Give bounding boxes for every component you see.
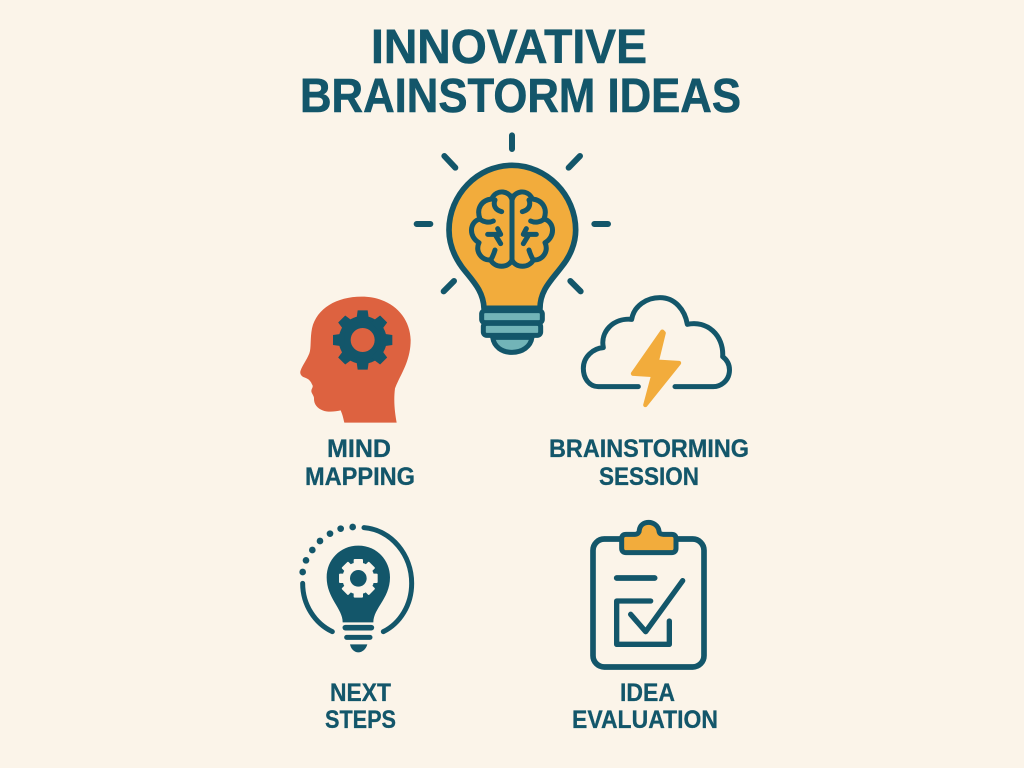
gear — [333, 310, 392, 370]
bulb rays — [417, 135, 608, 291]
label: next steps: STEPS — [325, 706, 396, 734]
label: mind mapping: MAPPING — [305, 463, 415, 491]
title: INNOVATIVE — [371, 21, 647, 74]
bulb base — [482, 311, 542, 352]
bulb bars — [345, 619, 371, 636]
clipboard clip — [622, 522, 676, 553]
check mark — [631, 581, 683, 632]
title — [300, 21, 741, 123]
lightning bolt — [633, 332, 679, 405]
progress ring — [303, 528, 412, 632]
label: next steps — [325, 679, 396, 734]
label: idea evaluation: EVALUATION — [572, 706, 718, 734]
icon: clipboard checklist — [593, 522, 704, 667]
icon: head with gear — [300, 297, 411, 423]
cloud outline — [583, 298, 729, 387]
label: idea evaluation — [572, 679, 718, 734]
label: next steps: NEXT — [330, 679, 391, 707]
icon: storm cloud — [583, 298, 729, 405]
check box — [617, 601, 669, 644]
label: brainstorming session: SESSION — [599, 463, 699, 491]
label: brainstorming session: BRAINSTORMING — [549, 435, 749, 463]
label: brainstorming session — [549, 435, 749, 491]
progress dots — [299, 524, 356, 575]
icon: next steps bulb — [299, 524, 412, 652]
clipboard board — [593, 539, 704, 667]
cream gear — [339, 559, 378, 598]
text line — [617, 569, 655, 586]
label: mind mapping: MIND — [327, 435, 391, 463]
icon: light bulb with brain — [417, 135, 608, 352]
bulb glass — [449, 165, 576, 308]
label: mind mapping — [305, 435, 415, 491]
head silhouette — [300, 297, 411, 423]
bulb body — [327, 546, 390, 622]
brain — [471, 192, 553, 266]
label: idea evaluation: IDEA — [620, 679, 675, 707]
title: BRAINSTORM IDEAS — [300, 70, 741, 123]
